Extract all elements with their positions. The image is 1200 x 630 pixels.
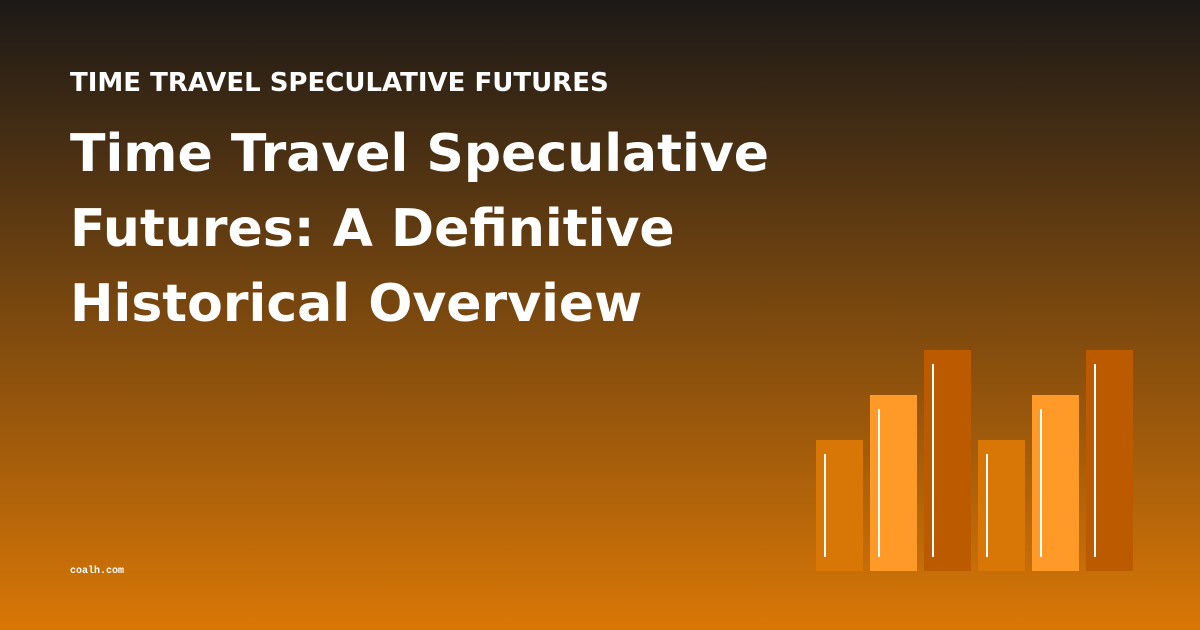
- bar 6: [1086, 350, 1133, 571]
- main title: Time Travel Speculative: [70, 124, 769, 184]
- bar 1: [816, 440, 863, 571]
- bar 3: [924, 350, 971, 571]
- bar 2: [870, 395, 917, 571]
- eyebrow heading: TIME TRAVEL SPECULATIVE FUTURES: [70, 68, 609, 98]
- bar 4: [978, 440, 1025, 571]
- source label: coalh.com: [70, 566, 124, 577]
- main title: Futures: A Definitive: [70, 199, 675, 259]
- main title: Historical Overview: [70, 274, 642, 334]
- main title: [70, 124, 769, 334]
- bar 5: [1032, 395, 1079, 571]
